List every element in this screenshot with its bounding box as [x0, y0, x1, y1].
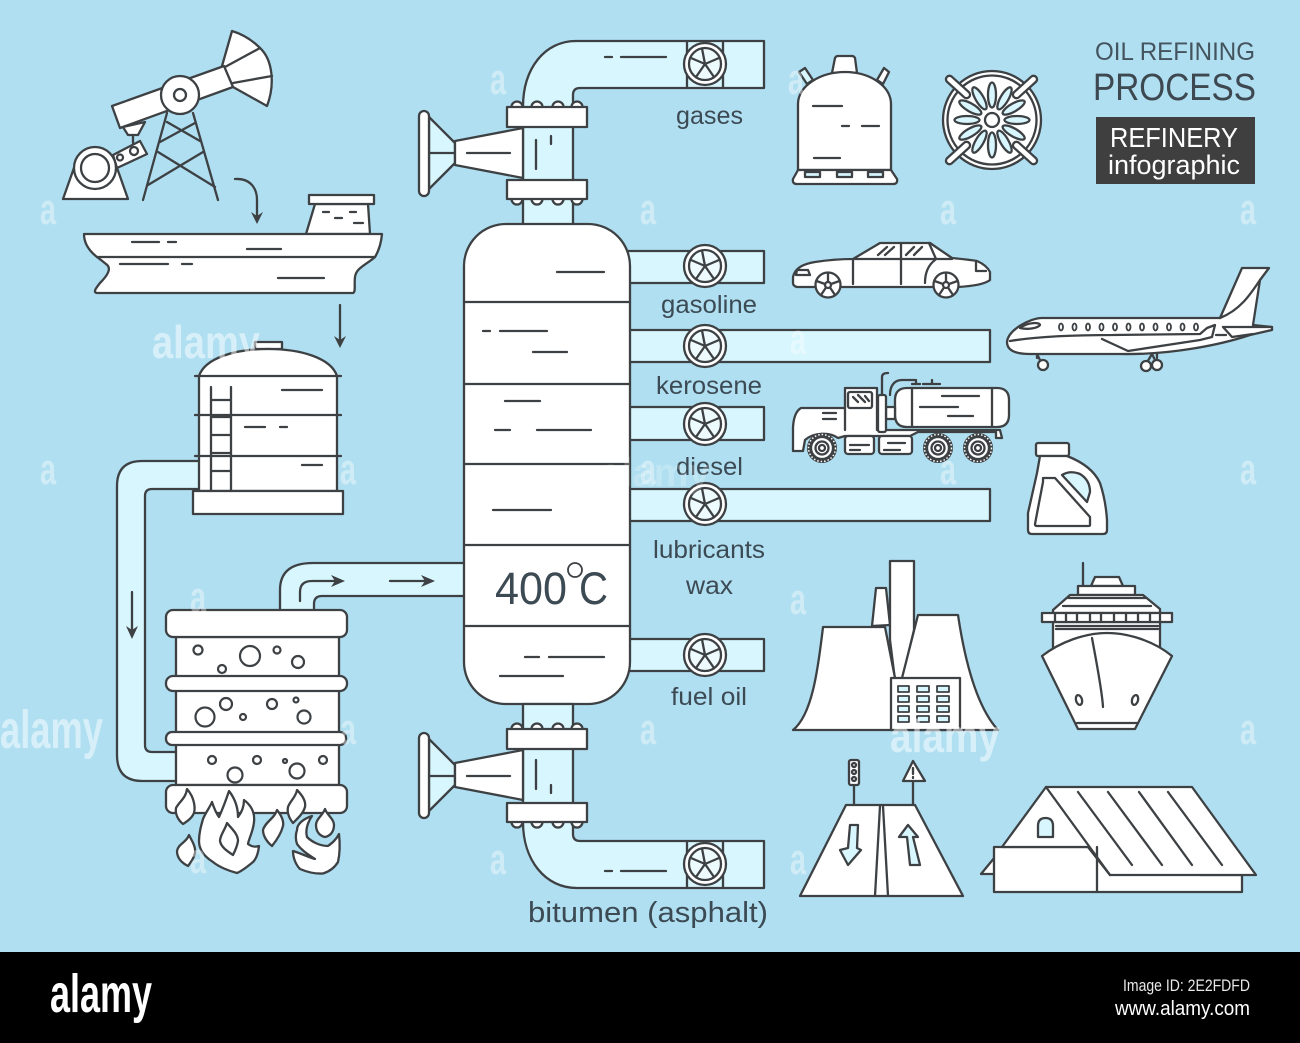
footer bar: Image ID: 2E2FDFD [1123, 976, 1250, 995]
title: OIL REFINING [1095, 38, 1255, 66]
valve: lubricants [684, 483, 726, 525]
valve: bitumen [684, 843, 726, 885]
icon: bottom side valve [419, 733, 523, 818]
watermark letters: a [490, 835, 506, 884]
watermark words: alamy [152, 316, 260, 368]
pipe: furnace to column [280, 563, 465, 610]
pipe: storage tank to furnace [117, 461, 199, 781]
temperature label: C [579, 563, 608, 614]
watermark letters: a [788, 55, 804, 104]
watermark letters: a [1240, 705, 1256, 754]
bottom column neck [507, 704, 587, 828]
pipe: lubricants [625, 489, 990, 521]
watermark letters: a [640, 185, 656, 234]
label: kerosene: kerosene [656, 372, 762, 400]
pipe: diesel [625, 407, 764, 440]
arrow: pump to tanker [235, 179, 263, 224]
icon: turbine fan [943, 71, 1041, 169]
label: gasoline: gasoline [661, 291, 757, 319]
watermark letters: a [640, 705, 656, 754]
badge: refinery infographic [1096, 117, 1255, 184]
watermark letters: a [1240, 445, 1256, 494]
icon: car [793, 243, 990, 298]
icon: gas storage tank [793, 56, 897, 184]
pipe: bitumen outlet [523, 822, 764, 888]
icon: tanker truck [793, 373, 1009, 463]
valve: gases [684, 43, 726, 85]
watermark letters: a [790, 315, 806, 364]
footer bar: www.alamy.com [1114, 998, 1250, 1020]
pipe: fuel oil [625, 639, 764, 671]
watermark letters: a [190, 573, 206, 622]
valve: gasoline [684, 245, 726, 287]
watermark letters: a [790, 575, 806, 624]
icon: airplane [1007, 268, 1272, 371]
watermark words: alamy [890, 710, 1000, 762]
icon: oil pump jack [63, 31, 272, 200]
icon: oil bottle [1028, 443, 1107, 534]
temperature label: 400 [495, 563, 567, 614]
icon: cruise ship [1042, 563, 1172, 729]
watermark words: alamy [600, 451, 711, 495]
title: PROCESS [1093, 67, 1256, 109]
label: fuel oil: fuel oil [671, 683, 747, 711]
icon: power plant [793, 561, 998, 730]
valve: fuel oil [684, 634, 726, 676]
watermark letters: a [940, 445, 956, 494]
label: bitumen: bitumen (asphalt) [528, 897, 768, 929]
label: diesel: diesel [676, 453, 743, 481]
watermark letters [40, 55, 1256, 884]
icon: crude oil storage tank [193, 342, 343, 514]
footer bar [0, 952, 1300, 1043]
pipe: gases outlet [523, 41, 764, 107]
watermark letters: a [790, 835, 806, 884]
watermark words: alamy [0, 700, 103, 760]
watermark letters: a [340, 445, 356, 494]
label: wax: wax [685, 572, 734, 600]
icon: top side valve [419, 111, 523, 196]
pipe: gasoline [625, 251, 764, 283]
watermark letters: a [490, 55, 506, 104]
title [1093, 38, 1256, 109]
pipe: kerosene [625, 330, 990, 362]
watermark words [0, 316, 1000, 762]
badge: refinery infographic: REFINERY [1110, 122, 1238, 153]
watermark letters: a [40, 185, 56, 234]
footer bar: alamy [50, 964, 152, 1024]
distillation column [464, 224, 630, 704]
arrow: tanker to storage tank [334, 305, 346, 348]
badge: refinery infographic: infographic [1108, 150, 1240, 180]
top column neck [507, 102, 587, 225]
icon: highway [800, 760, 963, 896]
watermark letters: a [1240, 185, 1256, 234]
watermark letters: a [640, 445, 656, 494]
icon: tanker ship [84, 195, 382, 293]
valve: kerosene [684, 325, 726, 367]
valve: diesel [684, 403, 726, 445]
temperature label [495, 563, 608, 614]
icon: furnace drum with bubbles [166, 610, 347, 813]
icon: flames [176, 789, 340, 874]
watermark letters: a [940, 185, 956, 234]
icon: house roof [981, 787, 1256, 892]
watermark letters: a [190, 834, 206, 883]
label: lubricants: lubricants [653, 536, 765, 564]
watermark letters: a [40, 445, 56, 494]
label: gases: gases [676, 102, 743, 130]
watermark letters: a [340, 705, 356, 754]
